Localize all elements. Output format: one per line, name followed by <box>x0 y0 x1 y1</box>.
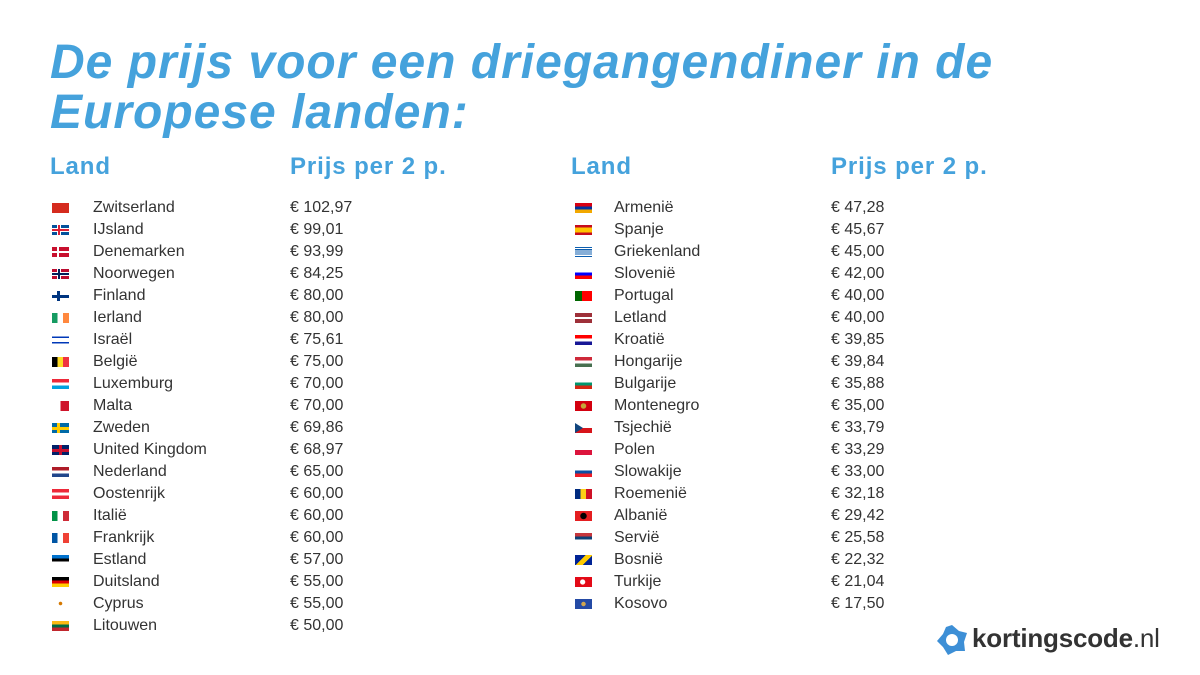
table: right column: Montenegro <box>614 397 699 414</box>
table: right column: € 45,00 <box>831 243 884 260</box>
table: left column: € 50,00 <box>290 617 343 634</box>
header: price left: Prijs per 2 p. <box>290 153 447 180</box>
table: left column: Ierland <box>93 309 142 326</box>
table: right column: € 45,67 <box>831 221 884 238</box>
table: left column: € 75,61 <box>290 331 343 348</box>
table: right column: Bulgarije <box>614 375 676 392</box>
table: left column: € 80,00 <box>290 287 343 304</box>
table: right column: € 39,85 <box>831 331 884 348</box>
table: right column: € 42,00 <box>831 265 884 282</box>
header: price right: Prijs per 2 p. <box>831 153 988 180</box>
table: left column: Zwitserland <box>93 199 175 216</box>
table: left column: Frankrijk <box>93 529 154 546</box>
table: right column: Polen <box>614 441 655 458</box>
table: right column: Albanië <box>614 507 667 524</box>
table: left column: Oostenrijk <box>93 485 165 502</box>
table: right column: Servië <box>614 529 659 546</box>
table: right column: Slowakije <box>614 463 682 480</box>
table: left column <box>52 199 352 634</box>
table: right column: € 35,00 <box>831 397 884 414</box>
title: De prijs voor een driegangendiner in de <box>50 36 993 89</box>
table: right column: € 29,42 <box>831 507 884 524</box>
table: left column: Zweden <box>93 419 150 436</box>
table: right column: Hongarije <box>614 353 682 370</box>
table: left column: € 75,00 <box>290 353 343 370</box>
table: right column: € 22,32 <box>831 551 884 568</box>
table: left column: € 57,00 <box>290 551 343 568</box>
table: left column: België <box>93 353 137 370</box>
table: left column: Luxemburg <box>93 375 173 392</box>
table: left column: € 70,00 <box>290 397 343 414</box>
table: left column: € 55,00 <box>290 595 343 612</box>
table: right column: Slovenië <box>614 265 675 282</box>
table: left column: € 60,00 <box>290 485 343 502</box>
table: left column: € 69,86 <box>290 419 343 436</box>
header: land right: Land <box>571 153 632 180</box>
table: left column: Denemarken <box>93 243 185 260</box>
table: left column: Estland <box>93 551 146 568</box>
table: left column: € 65,00 <box>290 463 343 480</box>
logo text: kortingscode.nl <box>972 623 1160 653</box>
table: left column: € 80,00 <box>290 309 343 326</box>
table: right column: € 17,50 <box>831 595 884 612</box>
table: right column: € 39,84 <box>831 353 884 370</box>
table: right column: € 25,58 <box>831 529 884 546</box>
title: Europese landen: <box>50 86 469 139</box>
table: right column: Roemenië <box>614 485 687 502</box>
table: left column: € 102,97 <box>290 199 352 216</box>
table: right column: Letland <box>614 309 666 326</box>
table: right column: € 40,00 <box>831 309 884 326</box>
table: left column: € 99,01 <box>290 221 343 238</box>
table: right column: € 21,04 <box>831 573 884 590</box>
table: right column: Tsjechië <box>614 419 672 436</box>
table: left column: € 60,00 <box>290 507 343 524</box>
table: right column: Kosovo <box>614 595 667 612</box>
table: right column: € 47,28 <box>831 199 884 216</box>
table: right column: € 33,29 <box>831 441 884 458</box>
table: right column: Turkije <box>614 573 661 590</box>
table: left column: Malta <box>93 397 132 414</box>
table: left column: Duitsland <box>93 573 160 590</box>
header: land left: Land <box>50 153 111 180</box>
title <box>50 36 993 139</box>
table: right column: € 33,00 <box>831 463 884 480</box>
table: left column: Nederland <box>93 463 167 480</box>
table: left column: Litouwen <box>93 617 157 634</box>
table: right column: € 35,88 <box>831 375 884 392</box>
table: left column: IJsland <box>93 221 144 238</box>
table: right column: Kroatië <box>614 331 665 348</box>
table: right column <box>575 199 884 612</box>
table: right column: € 32,18 <box>831 485 884 502</box>
table: left column: € 93,99 <box>290 243 343 260</box>
table: left column: € 70,00 <box>290 375 343 392</box>
table: left column: Israël <box>93 331 132 348</box>
table: right column: Armenië <box>614 199 674 216</box>
table: left column: € 55,00 <box>290 573 343 590</box>
table: left column: Noorwegen <box>93 265 175 282</box>
table: left column: United Kingdom <box>93 441 207 458</box>
table: right column: Portugal <box>614 287 674 304</box>
table: left column: Italië <box>93 507 127 524</box>
table: left column: € 60,00 <box>290 529 343 546</box>
table: right column: Bosnië <box>614 551 663 568</box>
table: right column: € 40,00 <box>831 287 884 304</box>
icon: logo star <box>937 625 967 655</box>
table: left column: Finland <box>93 287 145 304</box>
table: right column: € 33,79 <box>831 419 884 436</box>
logo <box>937 623 1160 655</box>
table: left column: Cyprus <box>93 595 144 612</box>
table: right column: Spanje <box>614 221 664 238</box>
table: right column: Griekenland <box>614 243 700 260</box>
table: left column: € 84,25 <box>290 265 343 282</box>
table: left column: € 68,97 <box>290 441 343 458</box>
